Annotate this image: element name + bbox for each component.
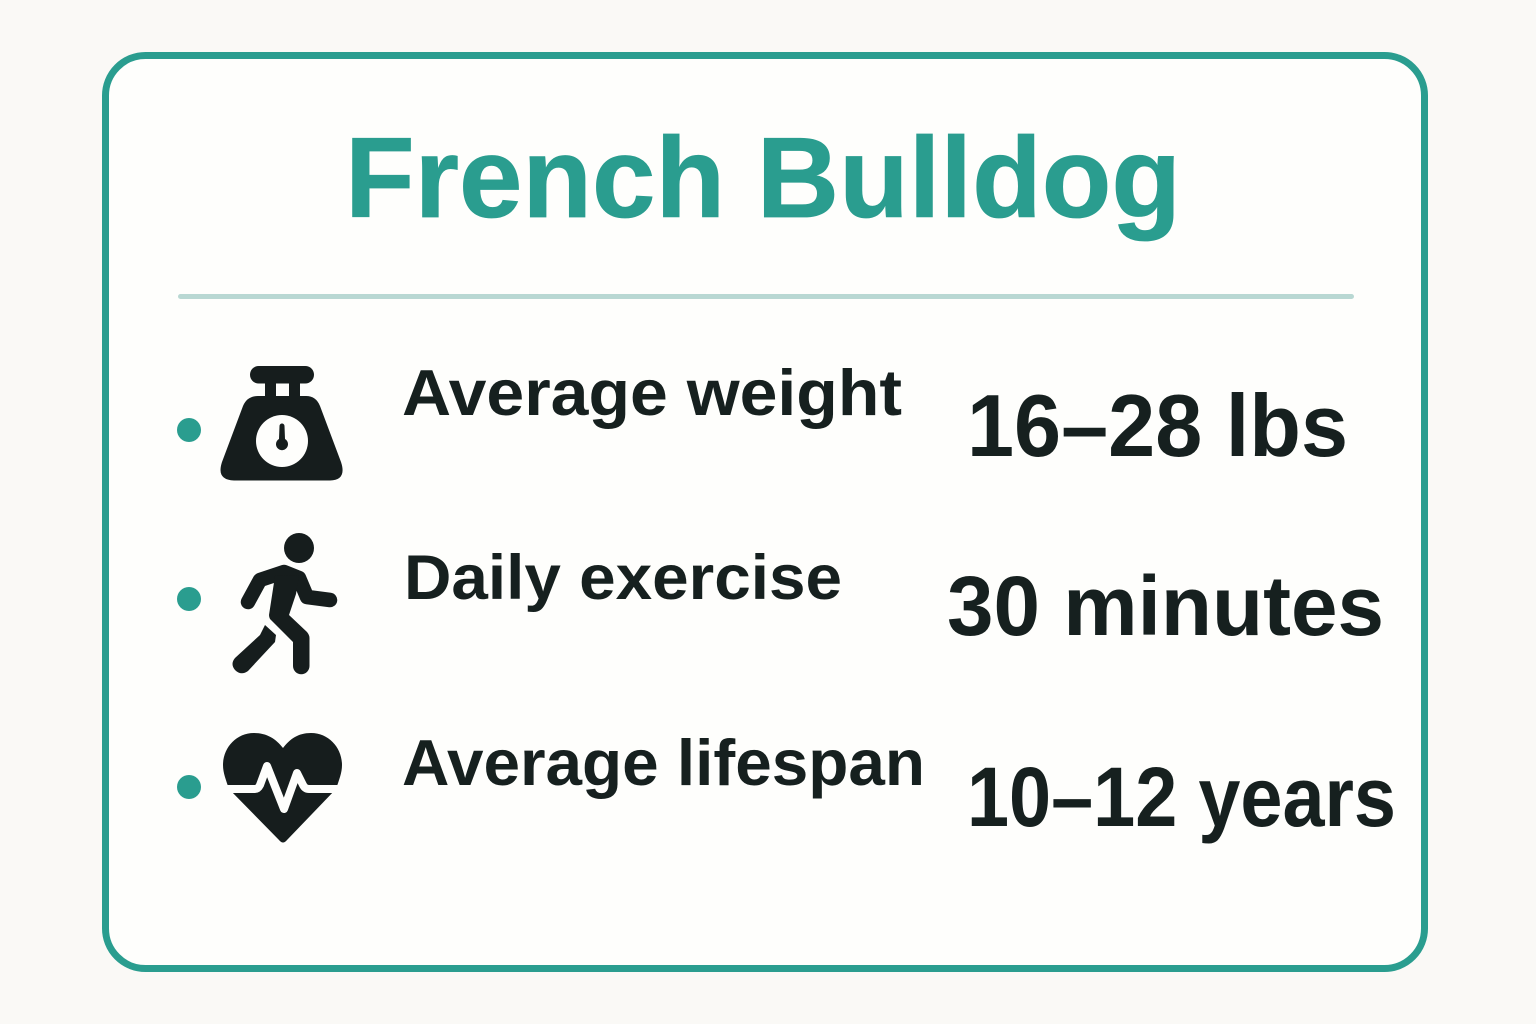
icon: scale — [220, 366, 343, 480]
icon: heart with pulse — [222, 733, 344, 842]
row: average lifespan — [177, 726, 1396, 844]
bullet — [177, 775, 201, 799]
label: daily exercise: Daily exercise — [404, 543, 842, 613]
value: exercise: 30 minutes — [947, 559, 1384, 653]
title: French Bulldog — [345, 115, 1181, 242]
bullet — [177, 418, 201, 442]
value: lifespan: 10–12 years — [967, 750, 1396, 844]
panel: card — [106, 56, 1424, 968]
value: weight: 16–28 lbs — [967, 376, 1348, 475]
row: average weight — [177, 356, 1348, 480]
icon: walking person — [232, 533, 330, 674]
row: daily exercise — [177, 533, 1384, 674]
label: average lifespan: Average lifespan — [402, 726, 925, 799]
bullet — [177, 587, 201, 611]
label: average weight: Average weight — [402, 356, 902, 429]
